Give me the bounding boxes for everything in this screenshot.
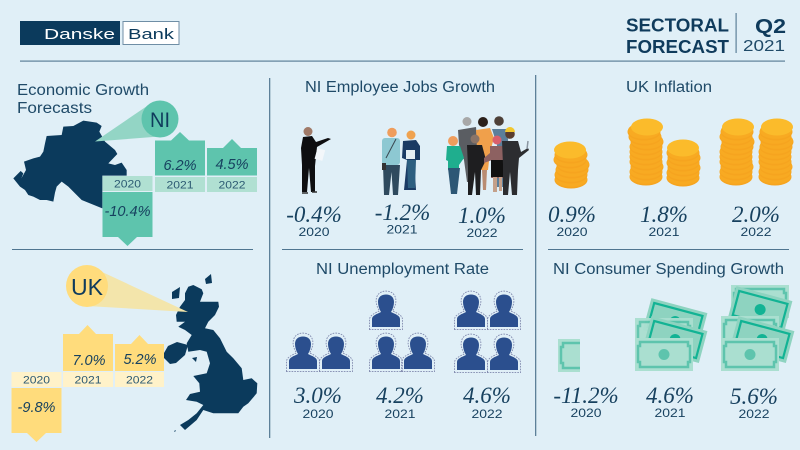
heading: NI Consumer Spending Growth: NI Consumer Spending Growth [553,261,784,278]
icon: banknote 2020 [558,339,580,372]
icon: group of workers 2022 [446,116,529,195]
map: UK [164,274,257,432]
bar: UK 2021 [63,325,113,387]
quarter label [743,16,786,55]
bar: UK 2020: -9.8% [18,400,56,416]
bar: NI 2022 [207,139,257,192]
value: spending 2020: 2020 [570,408,602,420]
bar: NI 2022: 2022 [218,180,246,192]
heading: NI Unemployment Rate: NI Unemployment Rate [316,261,489,278]
bar: NI 2020 [102,176,152,246]
map: Northern Ireland [13,121,127,208]
value: inflation 2021 [640,202,688,239]
bar: UK 2022: 5.2% [123,352,157,368]
value: inflation 2022: 2.0% [732,202,780,227]
value: spending 2020: -11.2% [553,383,619,408]
value: jobs 2022 [458,203,506,240]
value: unemployment 2021 [376,383,424,421]
value: unemployment 2020: 2020 [302,409,334,421]
bar: NI 2020: 2020 [114,178,141,190]
value: spending 2021: 2021 [654,408,686,420]
icon: one worker 2020 [301,127,331,193]
quarter label: Q2 [755,16,786,38]
value: inflation 2022 [732,202,780,239]
value: spending 2022: 2022 [738,409,770,421]
value: unemployment 2021: 2021 [384,409,416,421]
value: jobs 2022: 1.0% [458,203,506,228]
bar: NI 2021 [155,132,205,192]
title: Sectoral Forecast: SECTORAL [626,16,729,36]
value: jobs 2022: 2022 [466,228,498,240]
value: inflation 2021: 2021 [648,227,680,239]
title: Sectoral Forecast: FORECAST [626,37,729,57]
bar: NI 2020: -10.4% [105,204,151,220]
value: inflation 2020: 2020 [556,227,588,239]
value: jobs 2020: -0.4% [286,202,342,227]
heading: NI Employee Jobs Growth: NI Employee Jobs Growth [305,79,495,96]
value: jobs 2020 [286,202,342,239]
icon: banknotes 2022 [721,285,794,371]
value: unemployment 2022: 4.6% [463,383,511,408]
value: unemployment 2022 [463,383,511,421]
logo: Danske Bank: Bank [128,26,175,43]
callout: NI [95,100,178,142]
value: inflation 2022: 2022 [740,227,772,239]
bar: UK 2021: 2021 [74,374,102,386]
heading: UK Inflation: UK Inflation [626,79,712,96]
icon: people 2021 [370,291,434,372]
value: inflation 2021: 1.8% [640,202,688,227]
icon: coins 2022 [720,118,794,186]
bar: NI 2021: 2021 [166,180,194,192]
icon: people 2022 [454,291,520,373]
value: jobs 2020: 2020 [298,227,330,239]
value: spending 2021: 4.6% [646,383,694,408]
value: spending 2021 [646,383,694,420]
bar: UK 2021: 7.0% [72,353,106,369]
value: unemployment 2020 [293,383,342,421]
title: Sectoral Forecast [626,16,729,57]
icon: people 2020 [286,333,352,372]
callout: UK [66,265,188,312]
bar: NI 2021: 6.2% [163,158,197,174]
heading: Economic Growth Forecasts [17,82,149,117]
bar: UK 2020 [12,372,62,442]
value: unemployment 2021: 4.2% [376,383,424,408]
icon: two workers 2021 [382,128,420,195]
bar: UK 2022: 2022 [126,374,153,386]
icon: banknotes 2021 [635,298,707,371]
heading: Economic Growth Forecasts: Forecasts [17,100,92,117]
value: inflation 2020 [548,202,596,239]
value: unemployment 2022: 2022 [472,409,502,421]
heading: Economic Growth Forecasts: Economic Growth [17,82,149,99]
bar: NI 2022: 4.5% [215,157,249,173]
bar: UK 2022 [115,335,164,387]
value: jobs 2021: 2021 [386,224,418,236]
logo: Danske Bank [20,21,179,45]
value: spending 2020 [553,383,619,420]
quarter label: 2021 [743,38,785,55]
bar: UK 2020: 2020 [23,374,50,386]
icon: coins 2020 [554,142,590,188]
value: jobs 2021: -1.2% [375,200,430,225]
value: jobs 2021 [375,200,430,236]
icon: coins 2021 [628,118,700,186]
value: spending 2022: 5.6% [730,384,778,409]
callout: NI: NI [150,109,170,132]
value: spending 2022 [730,384,778,421]
logo: Danske Bank: Danske [44,26,115,43]
value: unemployment 2020: 3.0% [293,383,342,408]
value: inflation 2020: 0.9% [548,202,596,227]
callout: UK: UK [71,274,104,300]
